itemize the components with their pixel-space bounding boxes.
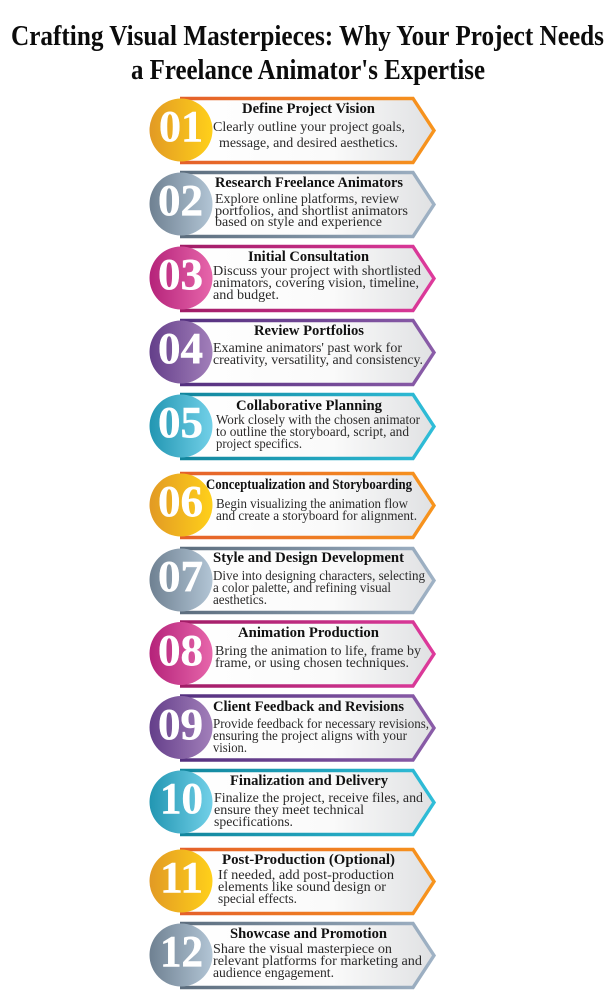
- step 05: Collaborative Planning: Collaborative Planning: [236, 398, 383, 414]
- step 12: Showcase and Promotion: Showcase and Promotion: [230, 926, 387, 942]
- step 07: Style and Design Development: Style and Design Development: [213, 550, 404, 566]
- step 10: Finalization and Delivery: ensure they meet technical: [214, 802, 364, 817]
- step 09: Client Feedback and Revisions: ensuring the project aligns with your: [213, 728, 407, 743]
- step 07: Style and Design Development: a color palette, and refining visual: [213, 580, 391, 595]
- step 11: Post-Production (Optional): Post-Production (Optional): [222, 852, 395, 868]
- step 01: Define Project Vision: Define Project Vision: [242, 101, 375, 117]
- step 02: Research Freelance Animators: portfolios, and shortlist animators: [215, 203, 408, 218]
- step 04: Review Portfolios: 04: [158, 324, 203, 373]
- step 09: Client Feedback and Revisions: Provide feedback for necessary revisions,: [213, 716, 429, 731]
- step 05: Collaborative Planning: project specifics.: [216, 436, 302, 451]
- step 08: Animation Production: 08: [158, 626, 203, 675]
- step 02: Research Freelance Animators: based on style and experience: [215, 214, 382, 229]
- step 04: Review Portfolios: Review Portfolios: [254, 323, 364, 339]
- step 10: Finalization and Delivery: [150, 770, 434, 834]
- step 11: Post-Production (Optional): If needed, add post-production: [218, 867, 394, 882]
- step 12: Showcase and Promotion: Share the visual masterpiece on: [213, 941, 392, 956]
- step 01: Define Project Vision: [150, 98, 434, 162]
- title: [11, 21, 604, 86]
- step 05: Collaborative Planning: Work closely with the chosen animator: [216, 412, 420, 427]
- step 02: Research Freelance Animators: [150, 172, 434, 236]
- step 09: Client Feedback and Revisions: 09: [158, 700, 203, 749]
- step 06: Conceptualization and Storyboarding: Conceptualization and Storyboarding: [206, 477, 413, 493]
- step 09: Client Feedback and Revisions: vision.: [213, 740, 247, 755]
- step 01: Define Project Vision: message, and desired aesthetics.: [219, 135, 398, 150]
- step 12: Showcase and Promotion: 12: [160, 927, 203, 976]
- step 08: Animation Production: frame, or using chosen techniques.: [215, 655, 409, 670]
- step 12: Showcase and Promotion: [150, 924, 434, 988]
- step 10: Finalization and Delivery: Finalize the project, receive files, and: [214, 790, 423, 805]
- step 06: Conceptualization and Storyboarding: 06: [158, 477, 203, 526]
- step 08: Animation Production: Bring the animation to life, frame by: [215, 643, 421, 658]
- step 03: Initial Consultation: and budget.: [213, 287, 279, 302]
- step 03: Initial Consultation: animators, covering vision, timeline,: [213, 275, 419, 290]
- step 02: Research Freelance Animators: Explore online platforms, review: [215, 191, 399, 206]
- step 05: Collaborative Planning: 05: [158, 398, 203, 447]
- step 04: Review Portfolios: creativity, versatility, and consistency.: [213, 352, 423, 367]
- step 11: Post-Production (Optional): elements like sound design or: [218, 879, 387, 894]
- step 07: Style and Design Development: aesthetics.: [213, 592, 267, 607]
- step 08: Animation Production: [150, 622, 434, 686]
- step 11: Post-Production (Optional): special effects.: [218, 891, 297, 906]
- step 10: Finalization and Delivery: Finalization and Delivery: [230, 773, 389, 789]
- step 11: Post-Production (Optional): [150, 850, 434, 914]
- step 03: Initial Consultation: 03: [158, 250, 203, 299]
- step 02: Research Freelance Animators: 02: [158, 176, 203, 225]
- step 03: Initial Consultation: Initial Consultation: [248, 249, 369, 265]
- step 06: Conceptualization and Storyboarding: [150, 474, 434, 538]
- step 01: Define Project Vision: 01: [159, 102, 203, 151]
- step 06: Conceptualization and Storyboarding: Begin visualizing the animation flow: [216, 496, 408, 511]
- step 11: Post-Production (Optional): 11: [160, 853, 203, 902]
- step 03: Initial Consultation: Discuss your project with shortlisted: [213, 263, 421, 278]
- step 07: Style and Design Development: [150, 548, 434, 612]
- step 12: Showcase and Promotion: relevant platforms for marketing and: [213, 953, 422, 968]
- step 10: Finalization and Delivery: specifications.: [214, 814, 293, 829]
- step 07: Style and Design Development: 07: [158, 552, 203, 601]
- title: a Freelance Animator's Expertise: [131, 55, 485, 86]
- step 04: Review Portfolios: Examine animators' past work for: [213, 340, 403, 355]
- step 05: Collaborative Planning: [150, 394, 434, 458]
- step 06: Conceptualization and Storyboarding: and create a storyboard for alignment.: [216, 508, 417, 523]
- step 09: Client Feedback and Revisions: [150, 696, 434, 760]
- step 01: Define Project Vision: Clearly outline your project goals,: [213, 119, 405, 134]
- step 09: Client Feedback and Revisions: Client Feedback and Revisions: [213, 699, 404, 715]
- step 12: Showcase and Promotion: audience engagement.: [213, 965, 334, 980]
- step 02: Research Freelance Animators: Research Freelance Animators: [215, 175, 403, 191]
- step 10: Finalization and Delivery: 10: [160, 774, 203, 823]
- step 08: Animation Production: Animation Production: [238, 625, 379, 641]
- step 03: Initial Consultation: [150, 246, 434, 310]
- step 05: Collaborative Planning: to outline the storyboard, script, and: [216, 424, 409, 439]
- step 04: Review Portfolios: [150, 320, 434, 384]
- step 07: Style and Design Development: Dive into designing characters, selecting: [213, 568, 425, 583]
